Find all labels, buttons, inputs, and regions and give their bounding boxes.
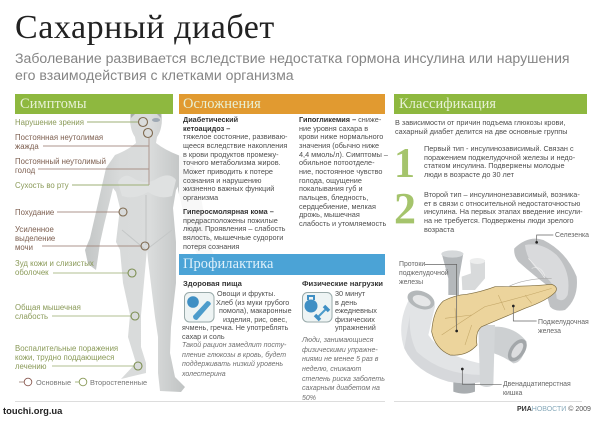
symptom labels: Сухость во рту (15, 181, 69, 190)
subtitle (15, 50, 570, 83)
panel: complications header: Осложнения (183, 96, 261, 112)
overlay behind complications text (179, 114, 385, 254)
symptom labels (15, 118, 118, 371)
panel: prevention header (179, 254, 385, 274)
symptom labels: Похудание (15, 208, 54, 217)
subtitle: его взаимодействия с клетками организма (15, 67, 294, 83)
physical activity heading: Физические нагрузки (302, 279, 383, 288)
symptom labels: Нарушение зрения (15, 118, 84, 127)
icon: food (184, 292, 214, 322)
type 2 text: Второй тип – инсулинонезависимый, возника- ет в связи с относительной недостаточностью инсулина. На первых этапах введение инсули- на не требуется. Подвержены люди зрелого возраста (424, 190, 583, 234)
callout lines (19, 118, 152, 386)
complications hyperosmolar: Гиперосмолярная кома – предрасположены пожилые люди. Проявления – слабость вялость, мышечные судороги потеря сознания (183, 207, 285, 251)
healthy food text: Овощи и фрукты. Хлеб (из муки грубого помола), макаронные изделия, рис, овес, ячмень, гречка. Не употреблять сахар и соль (182, 289, 292, 340)
physical activity note: Люди, занимающиеся физическими упражне- ниями не менее 5 раз в неделю, снижают степень риска заболеть сахарным диабетом на 50% (302, 337, 385, 402)
physical activity text: 30 минут в день ежедневных физических упражнений (335, 289, 377, 332)
numeral 1: 1 (394, 141, 415, 187)
symptom labels: Общая мышечная слабость (15, 303, 81, 321)
panel: classification header: Классификация (399, 96, 496, 112)
legend: Основные (36, 378, 71, 387)
subtitle: Заболевание развивается вследствие недостатка гормона инсулина или нарушения (15, 50, 570, 66)
legend (36, 378, 147, 387)
symptom labels: Воспалительные поражения кожи, трудно поддающиеся лечению (15, 344, 118, 371)
pancreas labels: Двенадцатиперстная кишка (503, 381, 571, 397)
panel: symptoms header: Симптомы (20, 96, 87, 112)
icon: weights (302, 292, 332, 322)
classification intro: В зависимости от причин подъема глюкозы крови, сахарный диабет делится на две основные группы (395, 118, 567, 136)
spleen (514, 239, 577, 311)
complications left column: Диабетический кетоацидоз – тяжелое состояние, развиваю- щееся вследствие накопления в крови продуктов промежу- точного метаболизма жиров. Может приводить к потере сознания и нарушению жизненно важных функций организма (183, 115, 288, 202)
panel: symptoms header (15, 94, 173, 114)
complications right column: Гипогликемия – сниже- ние уровня сахара в крови ниже нормального значения (обычно ниже 4,4 ммоль/л). Симптомы – обильное потоотделе- ние, постоянное чувство голода, ощущение покалывания губ и пальцев, бледность, сердцебиение, мелкая дрожь, мышечная слабость и утомляемость (299, 115, 388, 228)
panel: prevention header: Профилактика (183, 256, 274, 272)
symptom labels: Усиленное выделение мочи (15, 225, 55, 252)
panel: classification header (394, 94, 587, 114)
pancreas labels: Селезенка (555, 232, 589, 239)
credits: РИАНОВОСТИ © 2009 (517, 406, 591, 413)
numeral 2: 2 (394, 184, 416, 233)
pancreas labels: Поджелудочная железа (538, 319, 589, 335)
panel: complications header (179, 94, 385, 114)
symptom labels: Постоянная неутолимая жажда (15, 133, 103, 151)
pancreas callouts (425, 235, 553, 384)
symptom labels: Постоянный неутолимый голод (15, 157, 106, 175)
pancreas labels: Протоки поджелудочной железы (399, 261, 449, 286)
healthy food heading: Здоровая пища (183, 279, 242, 288)
symptom labels: Зуд кожи и слизистых оболочек (15, 259, 94, 277)
type 1 text: Первый тип - инсулинозависимый. Связан с поражением поджелудочной железы и недо- статком инсулина. Подвержены молодые люди в возрасте до 30 лет (424, 144, 575, 179)
source: touchi.org.ua (3, 405, 62, 416)
pancreas labels (399, 232, 589, 397)
title: Сахарный диабет (15, 9, 275, 46)
legend: Второстепенные (90, 378, 147, 387)
central vessel (478, 325, 495, 387)
duodenum (401, 287, 531, 383)
vessels (441, 250, 485, 394)
pancreas (432, 278, 556, 355)
healthy food note: Такой рацион замедлит посту- пление глюкозы в кровь, будет поддерживать низкий уровень холестерина (182, 342, 286, 378)
